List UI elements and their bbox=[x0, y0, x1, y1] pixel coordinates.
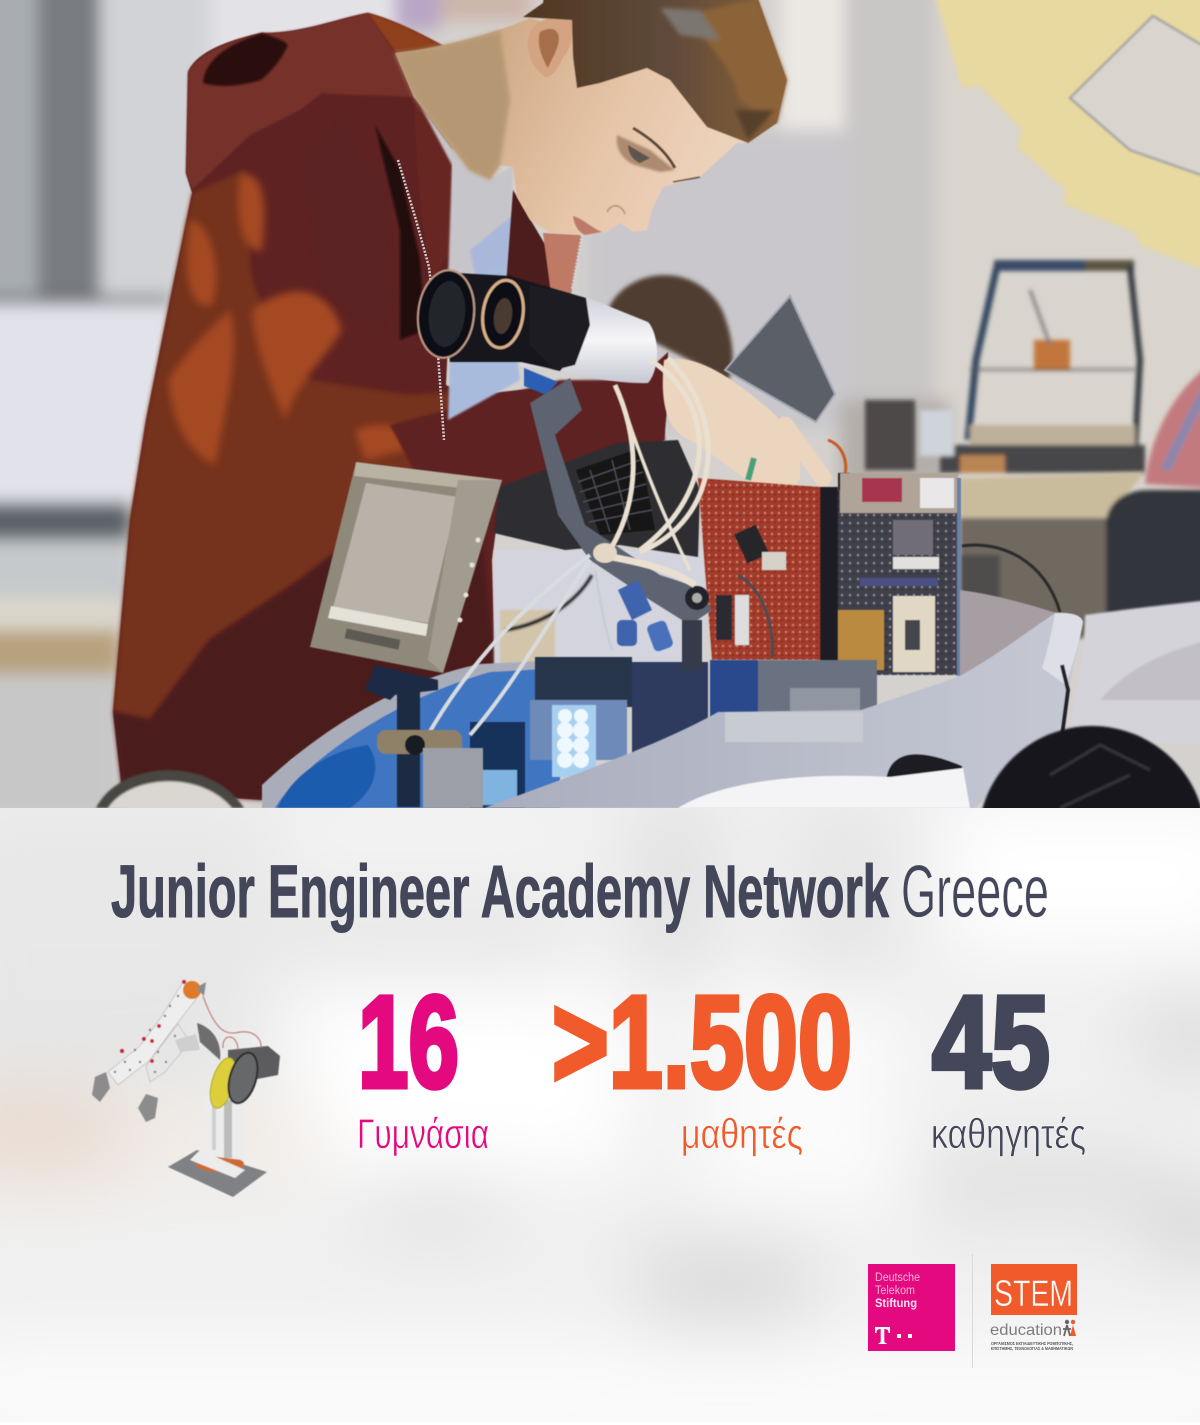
collar right side bbox=[505, 190, 582, 300]
yellow gear on wall bbox=[933, 0, 1200, 272]
logo: STEM education: ΕΠΙΣΤΗΜΗΣ, ΤΕΧΝΟΛΟΓΙΑΣ & ΜΑΘΗΜΑΤΙΚΩΝ bbox=[991, 1346, 1074, 1351]
stat: 45 teachers: 45 bbox=[932, 968, 1050, 1115]
hood opening bbox=[203, 33, 287, 86]
panel below laptop bbox=[494, 550, 704, 665]
forearm sleeve bbox=[390, 378, 666, 470]
hoodie base bbox=[113, 13, 668, 800]
robot tub shell bbox=[484, 613, 1083, 808]
hoodie shoulder panel bbox=[300, 118, 395, 330]
hair bbox=[523, 0, 787, 143]
hoodie lower body shadow bbox=[113, 510, 495, 800]
3D printer bbox=[865, 260, 1145, 473]
lower panel: blurred background bbox=[0, 808, 1200, 1370]
logo: Deutsche Telekom Stiftung: Telekom bbox=[875, 1285, 915, 1297]
logo: STEM education: education bbox=[990, 1322, 1062, 1339]
logo: Deutsche Telekom Stiftung: Deutsche bbox=[875, 1272, 920, 1284]
gray bracket arm bbox=[530, 378, 712, 670]
logo: Deutsche Telekom Stiftung: Stiftung bbox=[875, 1298, 917, 1310]
icon: T mark bbox=[875, 1327, 890, 1344]
laptop keyboard bbox=[494, 440, 700, 557]
mouth bbox=[573, 216, 602, 235]
photo background: blurred classroom bbox=[0, 0, 1200, 824]
stat: over 1,500 students: >1.500 bbox=[552, 968, 852, 1115]
sleeve sun patches bbox=[168, 175, 425, 465]
robot base plate bbox=[168, 1150, 267, 1197]
desk and chair, right bbox=[960, 365, 1200, 638]
eye socket bbox=[617, 135, 675, 172]
hood highlights bbox=[186, 13, 412, 190]
white cables bbox=[425, 358, 708, 740]
robot light unit bbox=[470, 657, 877, 808]
white wheel-arc and car body at the edges bbox=[96, 600, 1200, 808]
tub interior bbox=[262, 590, 1082, 808]
hoodie bbox=[113, 13, 668, 800]
stat: 16 schools: Γυμνάσια bbox=[357, 1110, 489, 1157]
divider bbox=[972, 1254, 973, 1368]
tower bbox=[203, 1095, 243, 1160]
logo: STEM education bbox=[990, 1264, 1077, 1351]
logo: STEM education: ΟΡΓΑΝΙΣΜΟΣ ΕΚΠΑΙΔΕΥΤΙΚΗΣ ΡΟΜΠΟΤΙΚΗΣ, bbox=[991, 1341, 1073, 1346]
logo: STEM education: STEM bbox=[994, 1273, 1073, 1314]
red wires bbox=[203, 996, 261, 1050]
stat: over 1,500 students bbox=[552, 968, 852, 1157]
camera head with lenses bbox=[414, 267, 657, 395]
grippers bbox=[92, 1072, 110, 1102]
sleeve shading bbox=[113, 170, 450, 720]
icon: robotic arm model bbox=[92, 980, 280, 1197]
stat: 16 schools: 16 bbox=[358, 968, 459, 1115]
laptop lid bbox=[725, 296, 835, 422]
orange pivot bbox=[183, 981, 201, 999]
logo: Deutsche Telekom Stiftung bbox=[868, 1264, 955, 1351]
title: Greece bbox=[901, 850, 1049, 933]
motherboard bbox=[698, 473, 1060, 676]
icon: two figures bbox=[1063, 1320, 1076, 1336]
background person's head bbox=[606, 275, 733, 380]
black ball bbox=[981, 724, 1200, 808]
photo: student building a robot bbox=[0, 0, 1200, 808]
wheels bbox=[205, 1055, 241, 1111]
t-shirt bbox=[420, 105, 520, 420]
hand bbox=[663, 359, 850, 498]
control box bbox=[228, 1046, 280, 1080]
gear hole bbox=[1070, 16, 1200, 178]
small display monitor bbox=[310, 462, 502, 673]
stat: over 1,500 students: μαθητές bbox=[681, 1110, 803, 1157]
dark sector plate bbox=[197, 1023, 220, 1060]
ear bbox=[528, 17, 573, 77]
arm beams bbox=[108, 982, 197, 1085]
zip bbox=[398, 160, 444, 440]
boy's head and neck bbox=[395, 0, 787, 235]
monitor stand bbox=[365, 665, 483, 808]
stat: 45 teachers: καθηγητές bbox=[931, 1110, 1086, 1157]
